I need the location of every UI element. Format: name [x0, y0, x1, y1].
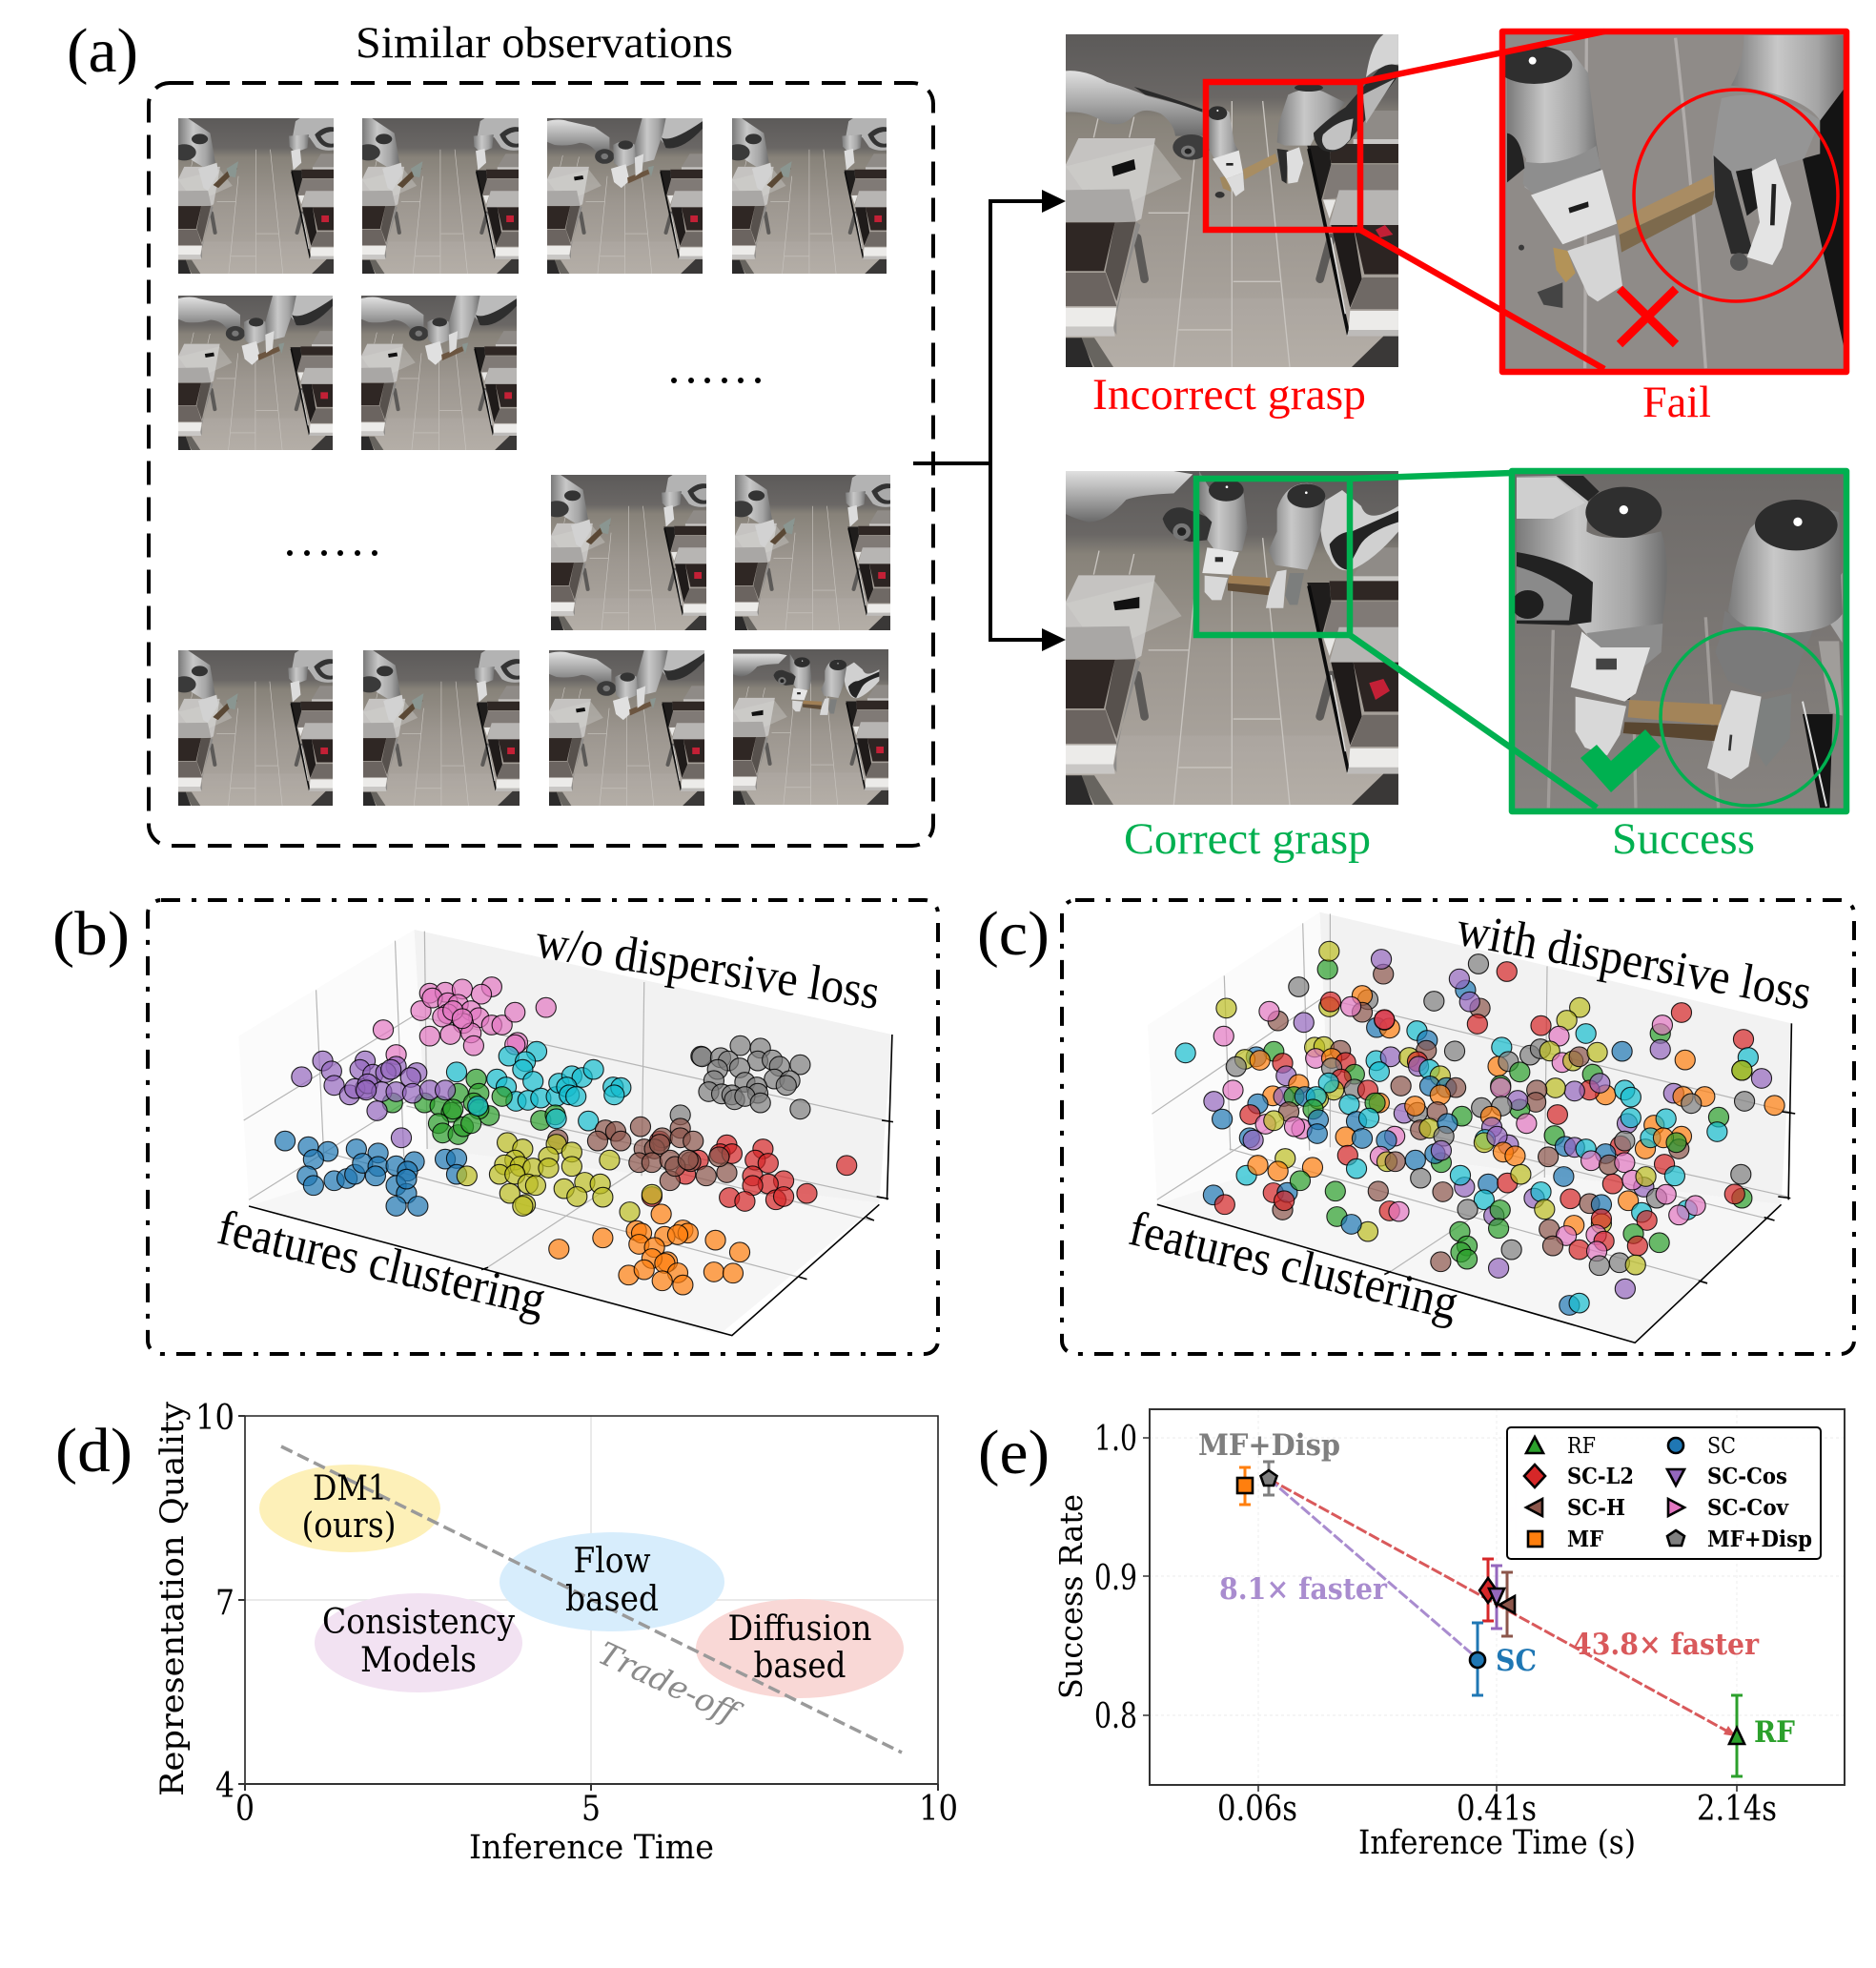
- x tick labels: 0.41s: [1457, 1790, 1537, 1829]
- y tick labels: 7: [215, 1584, 234, 1623]
- bubble labels: based: [753, 1647, 846, 1686]
- label: w/o dispersive loss: w/o dispersive loss: [532, 914, 884, 1020]
- y axis title: Success Rate: [1052, 1494, 1090, 1699]
- icon: red cross: [1620, 289, 1676, 344]
- tick marks: [1143, 1438, 1737, 1792]
- bubble labels: [301, 1469, 871, 1686]
- legend: MF: [1567, 1527, 1604, 1552]
- x tick labels: 0: [235, 1790, 255, 1829]
- legend: MF+Disp: [1707, 1527, 1812, 1552]
- thumbnail row 3: [545, 475, 890, 630]
- 3D axes: [1148, 912, 1795, 1343]
- annotations: 8.1× faster: [1219, 1572, 1388, 1607]
- bubble labels: Diffusion: [728, 1609, 871, 1649]
- x tick labels: 10: [919, 1790, 958, 1829]
- caption: Correct grasp: Correct grasp: [1124, 814, 1371, 864]
- caption: Fail: Fail: [1642, 378, 1711, 427]
- bubble labels: (ours): [301, 1507, 397, 1546]
- image: correct grasp scene: [1066, 471, 1398, 805]
- data markers: [1237, 1470, 1744, 1744]
- arrow: split from observations to outcomes: [913, 190, 1066, 651]
- image: incorrect grasp scene: [1066, 34, 1398, 367]
- axes frame: [1150, 1409, 1845, 1785]
- scatter: dispersed features: [1175, 941, 1784, 1315]
- panel: features clustering with dispersive loss: [1062, 900, 1854, 1354]
- panel label (d): (d): [55, 1416, 133, 1486]
- bubble: DM1: [259, 1465, 440, 1552]
- x tick labels: 0.06s: [1217, 1790, 1297, 1829]
- label: with dispersive loss: with dispersive loss: [1453, 902, 1816, 1021]
- y tick labels: 4: [215, 1767, 234, 1806]
- bubble labels: based: [565, 1580, 659, 1619]
- zoom callout: green frame and connector lines: [1196, 471, 1846, 811]
- y axis title: Representation Quality: [153, 1401, 192, 1796]
- bubble labels: DM1: [313, 1469, 387, 1508]
- arrowhead: [1723, 1726, 1736, 1736]
- y tick labels: 1.0: [1094, 1420, 1137, 1459]
- axes frame: [245, 1416, 938, 1784]
- zoom callout: red frame and connector lines: [1206, 31, 1846, 372]
- chart: success rate vs inference time: [1052, 1409, 1845, 1862]
- thumbnail row 4: [173, 649, 888, 806]
- annotations: SC: [1496, 1644, 1537, 1678]
- panel: success zoom view: [1512, 471, 1846, 811]
- legend: SC-H: [1567, 1495, 1625, 1521]
- panel: features clustering without dispersive loss: [148, 900, 938, 1354]
- scatter: clustered features: [275, 977, 857, 1295]
- legend: [1507, 1427, 1821, 1559]
- trade-off dashed line: [281, 1446, 902, 1753]
- label: features clustering: features clustering: [213, 1200, 550, 1327]
- y tick labels: [1094, 1420, 1137, 1736]
- error bars: [1239, 1462, 1743, 1776]
- legend: RF: [1567, 1434, 1596, 1459]
- dashed speedup lines: [1269, 1479, 1733, 1734]
- bubble: flow based: [500, 1532, 724, 1631]
- bubble: diffusion based: [696, 1599, 904, 1698]
- panel label (c): (c): [977, 899, 1050, 969]
- label: features clustering: features clustering: [1124, 1201, 1463, 1331]
- hidden SC-Cov point under legend: [1508, 1490, 1523, 1537]
- thumbnail row 1: [173, 118, 887, 274]
- legend: SC-Cos: [1707, 1464, 1787, 1489]
- annotation: Trade-off: Trade-off: [593, 1634, 748, 1733]
- icon: green check: [1580, 729, 1661, 792]
- x axis title: Inference Time (s): [1358, 1824, 1636, 1862]
- bubble labels: Models: [360, 1641, 477, 1680]
- bubble labels: Flow: [574, 1542, 651, 1581]
- y tick labels: 10: [195, 1399, 234, 1438]
- heading: Similar observations: Similar observations: [356, 18, 733, 68]
- x axis line: [238, 1416, 938, 1791]
- x tick labels: 5: [581, 1790, 601, 1829]
- panel label (a): (a): [67, 16, 138, 86]
- bubble labels: Consistency: [322, 1603, 516, 1642]
- thumbnail row 2: [178, 296, 517, 450]
- x tick labels: 2.14s: [1697, 1790, 1777, 1829]
- y tick labels: 0.9: [1094, 1559, 1137, 1598]
- x tick labels: [1217, 1790, 1777, 1829]
- annotations: MF+Disp: [1198, 1428, 1340, 1463]
- annotations: [1198, 1428, 1795, 1750]
- x tick labels: [235, 1790, 958, 1829]
- panel: similar observations dashed box: [149, 83, 933, 846]
- panel label (e): (e): [978, 1418, 1050, 1487]
- y tick labels: 0.8: [1094, 1697, 1137, 1736]
- panel label (b): (b): [52, 899, 130, 969]
- legend: SC: [1707, 1434, 1736, 1459]
- x axis title: Inference Time: [469, 1829, 714, 1867]
- caption: Incorrect grasp: Incorrect grasp: [1092, 370, 1366, 420]
- legend: SC-Cov: [1707, 1495, 1789, 1521]
- annotations: 43.8× faster: [1573, 1628, 1760, 1662]
- 3D axes: [238, 930, 893, 1336]
- legend: SC-L2: [1567, 1464, 1634, 1489]
- y tick labels: [195, 1399, 234, 1806]
- ellipsis dots lower: [287, 550, 377, 556]
- chart: representation quality vs inference time trade-off: [153, 1399, 958, 1867]
- panel: fail zoom view: [1496, 31, 1846, 372]
- ellipsis dots upper: [671, 378, 761, 383]
- annotations: RF: [1754, 1715, 1795, 1750]
- bubble: consistency models: [315, 1593, 522, 1692]
- caption: Success: Success: [1612, 814, 1755, 864]
